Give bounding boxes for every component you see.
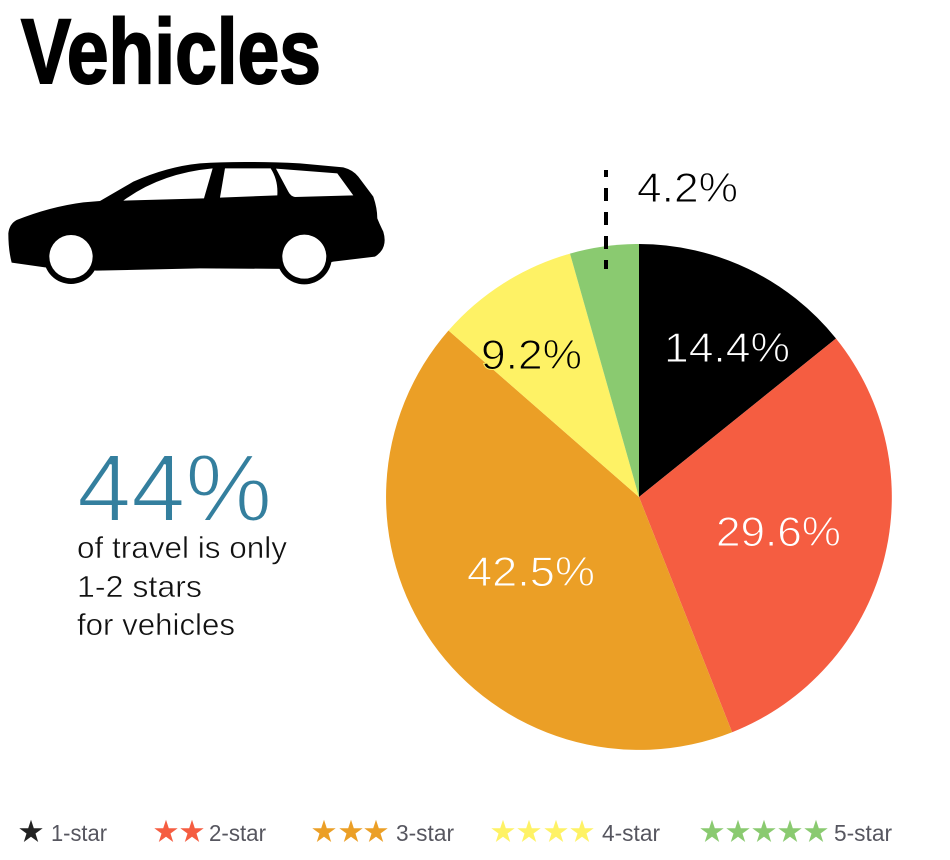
- legend: 5-star: 5-star: [834, 820, 892, 846]
- legend: [19, 820, 892, 846]
- legend: 3-star: 3-star: [396, 820, 454, 846]
- legend: 1-star: 1-star: [51, 820, 107, 846]
- stat description: for vehicles: [77, 607, 235, 642]
- label 29.6%: 29.6%: [716, 508, 841, 555]
- legend: 2-star: [154, 820, 266, 846]
- slice: 1-star 14.4%: [639, 244, 836, 497]
- legend: 4-star: [491, 820, 660, 846]
- slice: 3-star 42.5%: [386, 330, 732, 750]
- pie chart: [386, 244, 892, 750]
- legend: 1-star: [19, 820, 107, 846]
- leader line: [604, 170, 608, 269]
- slice: 2-star 29.6%: [639, 338, 892, 732]
- legend: 4-star: 4-star: [602, 820, 660, 846]
- slice: 5-star 4.2%: [570, 244, 639, 497]
- label 9.2%: 9.2%: [481, 331, 582, 378]
- legend: 5-star: [700, 820, 892, 846]
- title: Vehicles: [21, 1, 321, 103]
- label 42.5%: 42.5%: [467, 548, 595, 595]
- icon: car: [8, 162, 385, 284]
- big stat: 44%: [77, 435, 272, 542]
- label 14.4%: 14.4%: [664, 324, 790, 371]
- stat description: [77, 530, 287, 642]
- legend: 3-star: [312, 820, 454, 846]
- stat description: 1-2 stars: [77, 569, 202, 604]
- slice: 4-star 9.2%: [448, 254, 639, 497]
- legend: 2-star: 2-star: [209, 820, 266, 846]
- label 4.2%: 4.2%: [637, 164, 738, 211]
- stat description: of travel is only: [77, 530, 287, 565]
